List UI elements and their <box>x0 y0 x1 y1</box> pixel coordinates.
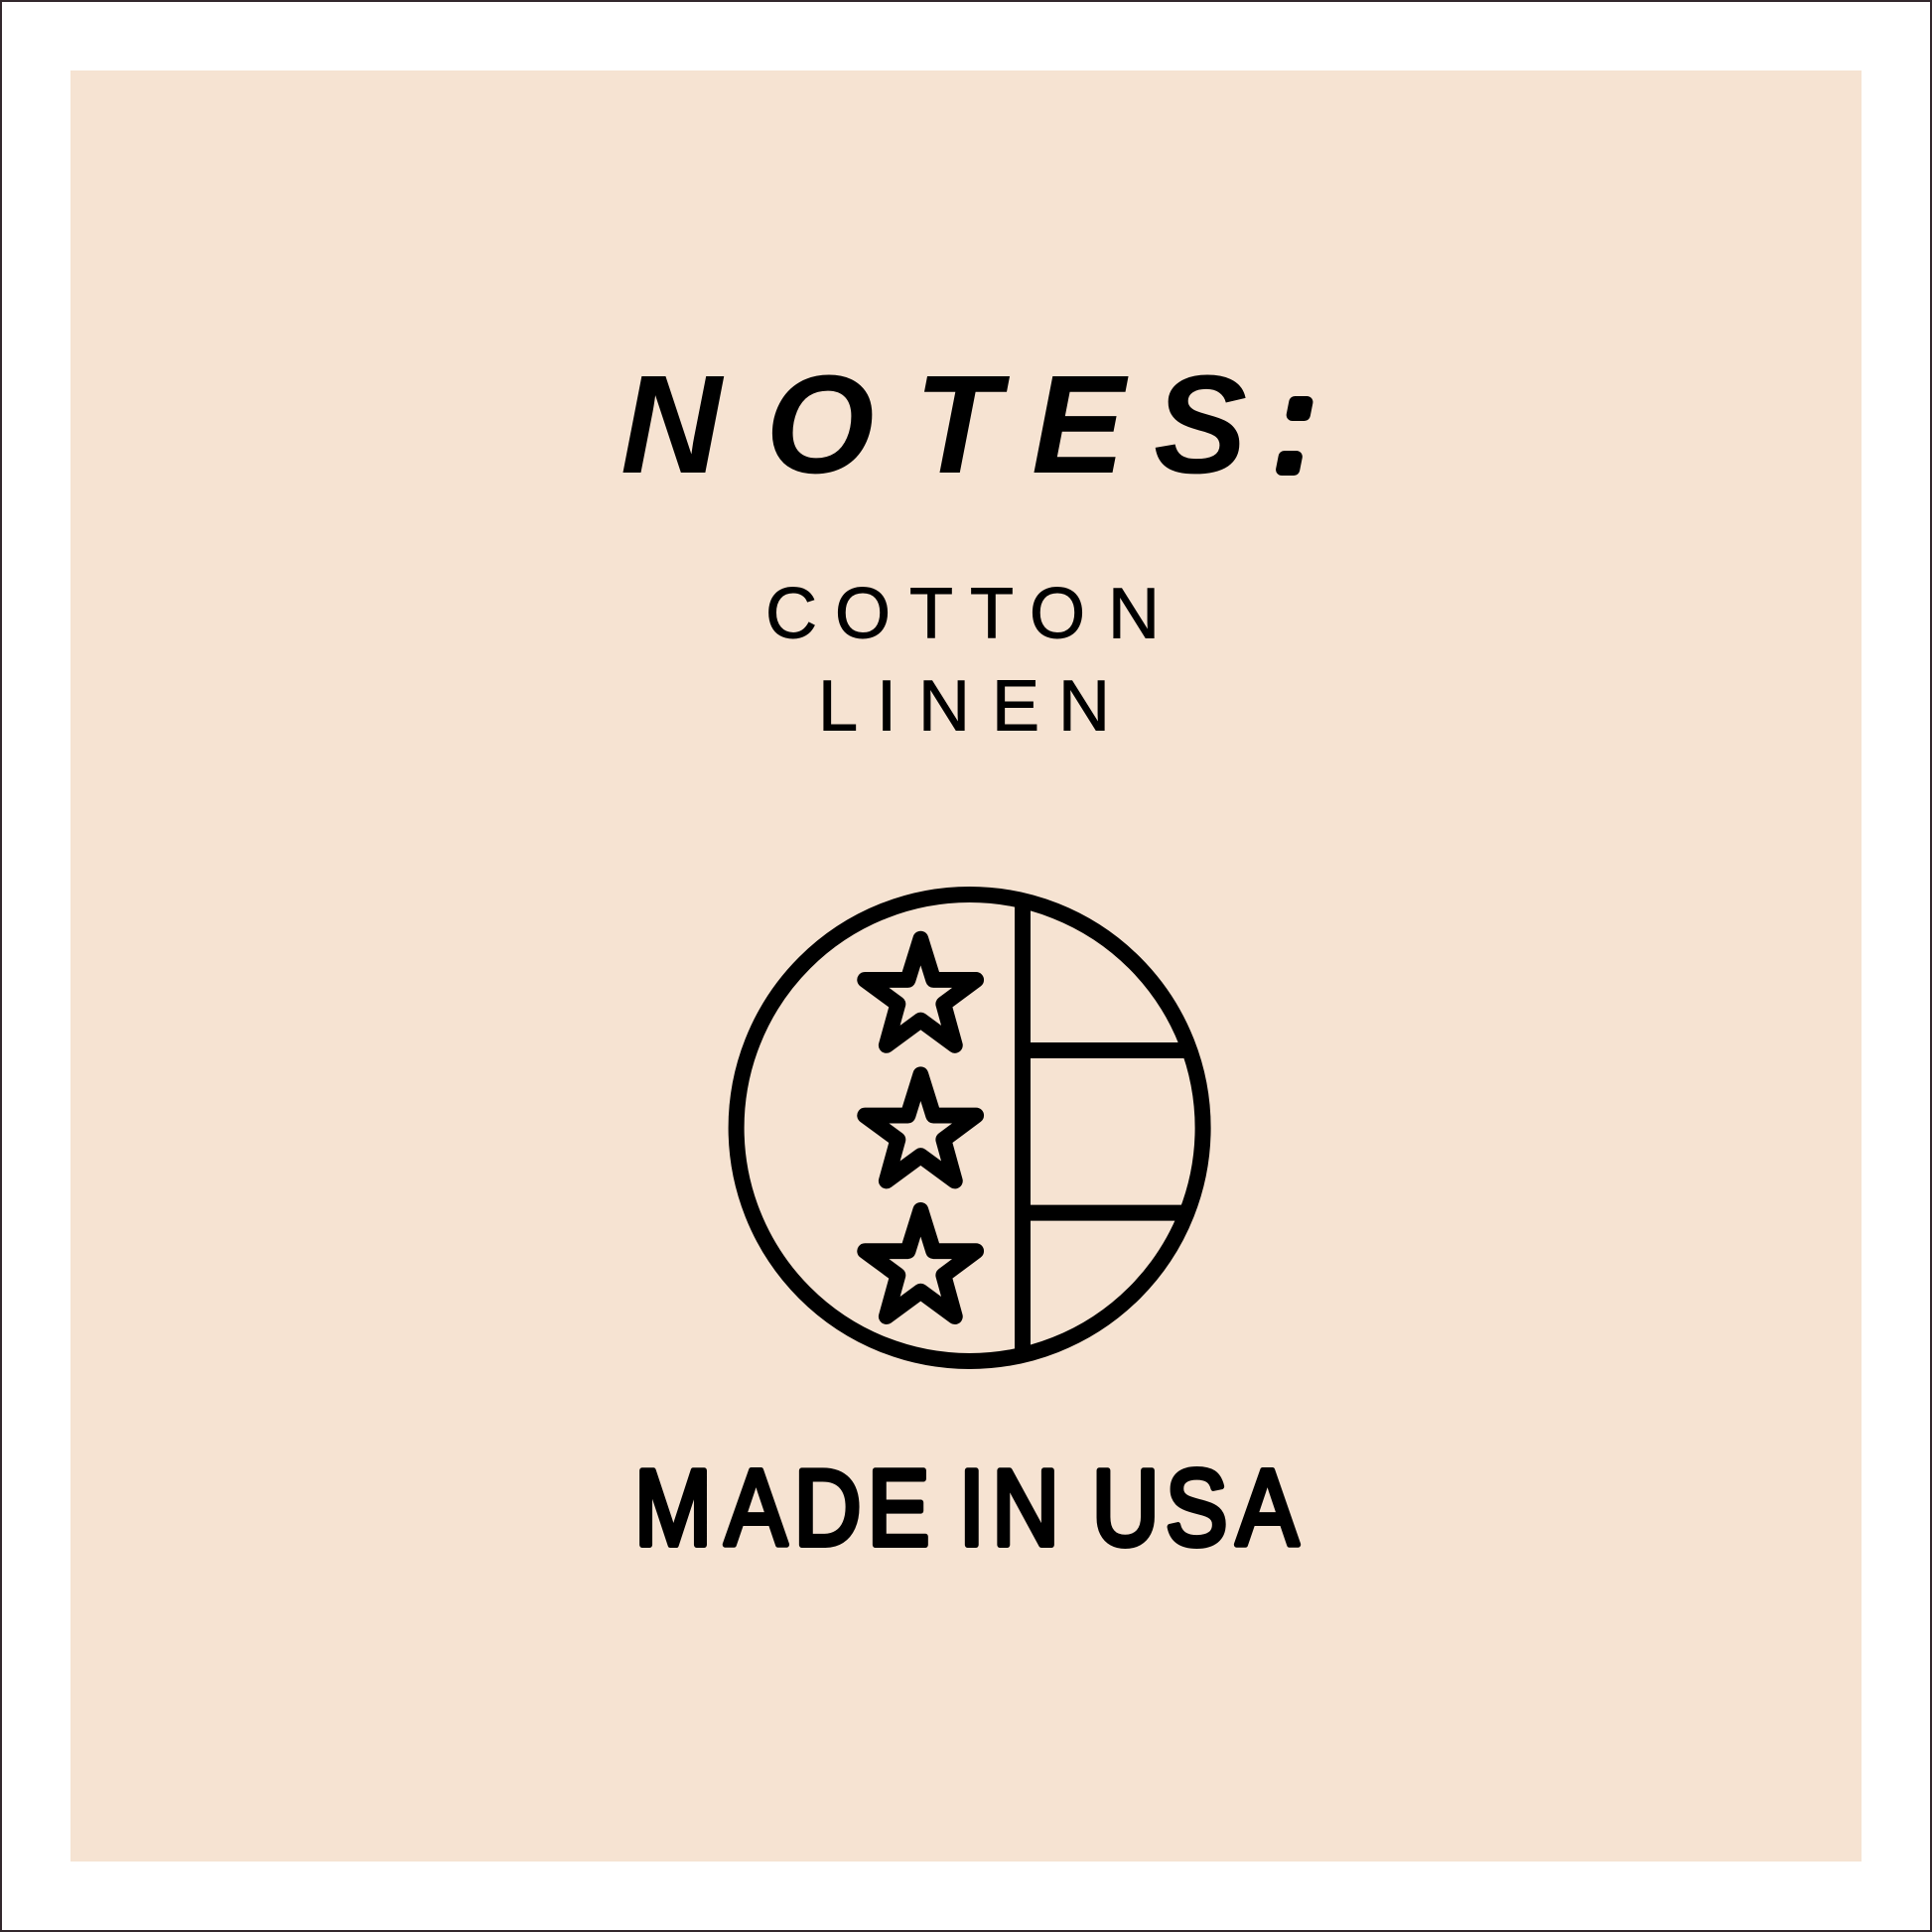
title: NOTES: : <box>1277 355 1312 497</box>
star: top <box>865 939 976 1045</box>
icon: USA flag badge with stars <box>737 895 1203 1361</box>
text: made in USA: MADE IN USA <box>634 1447 1299 1569</box>
flag vertical bar <box>1015 898 1031 1357</box>
text: materials list <box>765 574 1160 747</box>
title: NOTES: NOTES <box>621 345 1247 502</box>
star: bottom <box>865 1210 976 1316</box>
flag upper stripe <box>1023 1042 1189 1058</box>
badge ring <box>737 895 1203 1361</box>
material: linen: LINEN <box>818 667 1110 747</box>
star: middle <box>865 1074 976 1180</box>
flag lower stripe <box>1023 1205 1186 1221</box>
material: cotton: COTTON <box>765 574 1160 653</box>
